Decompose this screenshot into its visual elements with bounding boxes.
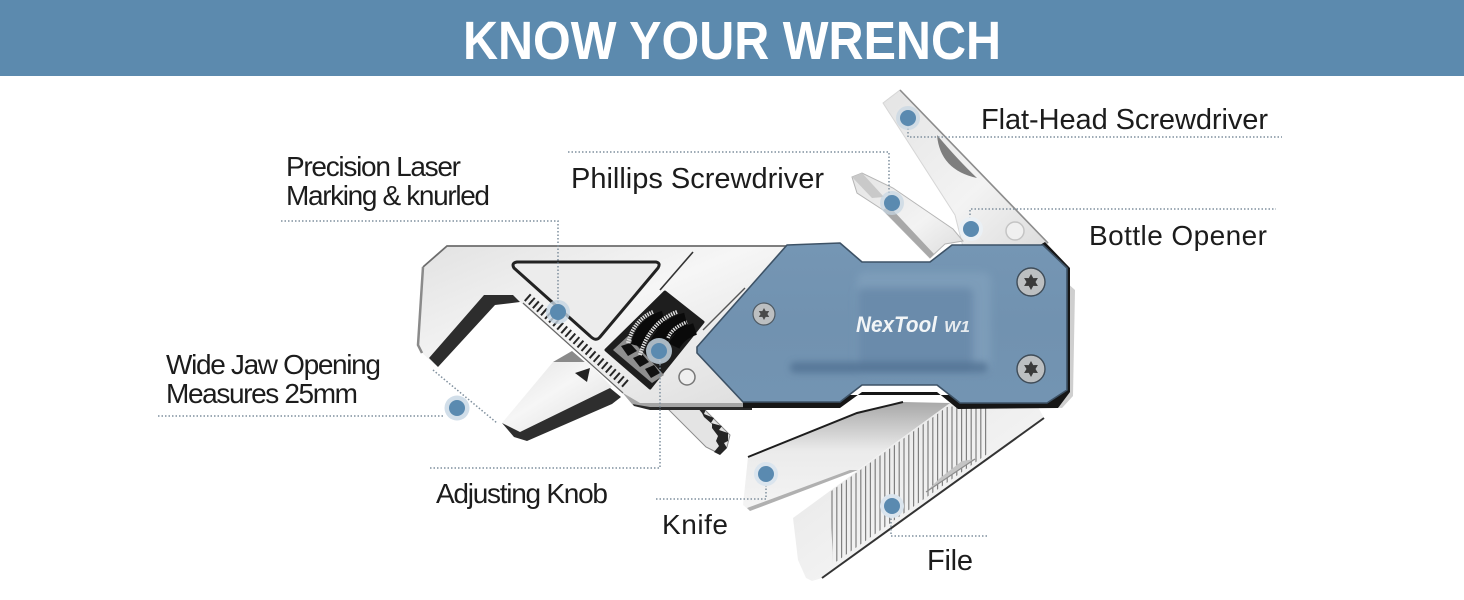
callout: precision laser marking: Precision Laser <box>286 151 461 182</box>
adjustment rack <box>662 403 730 455</box>
callout: phillips screwdriver <box>568 152 904 215</box>
callout: knife <box>656 462 778 540</box>
precision ruler markings <box>523 297 628 393</box>
callout: wide jaw opening: Wide Jaw Opening <box>166 349 381 380</box>
title banner: KNOW YOUR WRENCH <box>463 11 1001 71</box>
blue handle <box>697 243 1067 403</box>
file blade <box>793 400 1044 581</box>
triangular cutout <box>513 262 659 339</box>
file teeth hatch <box>831 406 986 562</box>
callout: file: File <box>927 545 973 577</box>
rivet <box>679 369 695 385</box>
callout: phillips screwdriver: Phillips Screwdriver <box>571 163 824 195</box>
callout: adjusting knob: Adjusting Knob <box>436 478 608 509</box>
callout: flat-head screwdriver: Flat-Head Screwdriver <box>981 104 1268 136</box>
screw bottom right <box>1017 355 1045 383</box>
callout: precision laser marking <box>281 151 570 324</box>
callout: precision laser marking: Marking & knurled <box>286 180 490 211</box>
main wrench body <box>418 246 790 410</box>
knife blade <box>743 402 950 511</box>
adjusting knob window <box>606 292 703 388</box>
flat-head screwdriver blade <box>883 90 1048 247</box>
callout: wide jaw opening: Measures 25mm <box>166 378 358 409</box>
lower jaw <box>502 351 621 441</box>
screw top right <box>1017 268 1045 296</box>
upper jaw inner face <box>429 295 520 367</box>
screw left <box>753 303 775 325</box>
phillips screwdriver bit <box>852 173 963 258</box>
handle recess <box>857 272 991 372</box>
handle back layers <box>743 242 1075 409</box>
wrench illustration <box>418 90 1075 581</box>
callout: bottle opener <box>959 209 1276 251</box>
callout: wide jaw opening <box>158 349 497 423</box>
callout: file <box>880 494 988 577</box>
callout: knife: Knife <box>662 509 728 540</box>
blue handle: W1 <box>944 319 970 336</box>
callout: bottle opener: Bottle Opener <box>1089 220 1267 251</box>
title banner <box>0 0 1464 76</box>
brand logo: NexTool <box>856 312 938 337</box>
callout: adjusting knob <box>430 338 672 509</box>
slant groove <box>660 252 693 290</box>
